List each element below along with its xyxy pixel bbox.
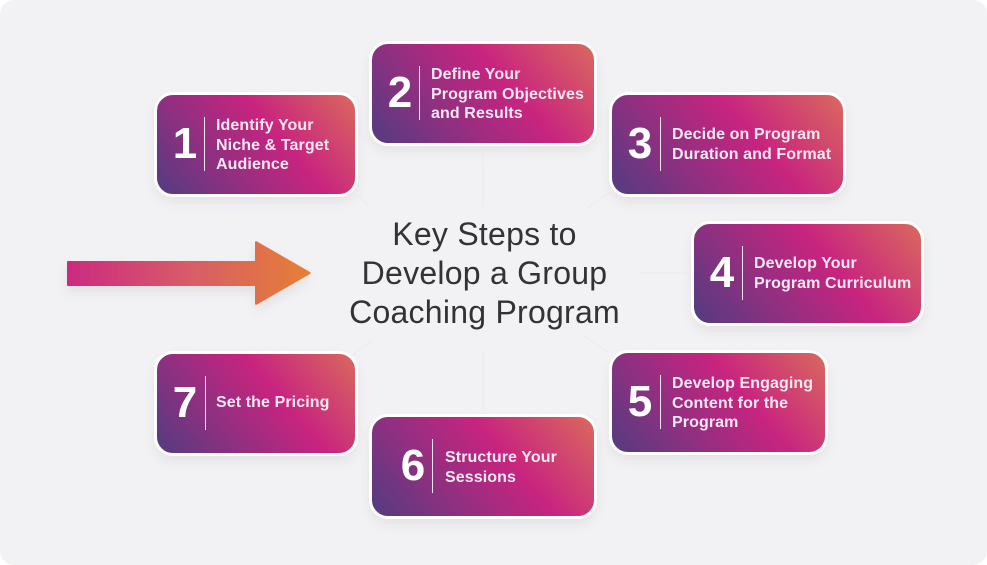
step number 6: 6 [401, 441, 425, 490]
step number 5: 5 [628, 377, 652, 426]
card: step 1 [154, 92, 358, 197]
step text 5 [672, 375, 813, 431]
step text 2: and Results [431, 105, 523, 122]
step number 7: 7 [173, 378, 197, 427]
card: step 6 [369, 414, 597, 519]
step text 2: Program Objectives [431, 86, 584, 102]
step text 1: Niche & Target [216, 136, 329, 154]
title: Develop a Group [362, 255, 607, 291]
step text 5: Develop Engaging [672, 375, 813, 392]
card: step 4 [691, 221, 924, 326]
card: step 3 [609, 92, 846, 197]
step text 6: Structure Your [445, 449, 557, 466]
step text 4 [754, 255, 911, 292]
step text 3: Decide on Program [672, 126, 820, 143]
card: step 7 [154, 351, 358, 456]
card: step 2 [369, 41, 597, 146]
step text 1: Identify Your [216, 117, 314, 134]
step number 4: 4 [710, 248, 734, 297]
card: step 5 [609, 350, 828, 455]
step number 3: 3 [628, 119, 652, 168]
step text 2: Define Your [431, 66, 520, 83]
step text 1: Audience [216, 156, 289, 173]
step text 4: Program Curriculum [754, 274, 911, 292]
step text 7: Set the Pricing [216, 394, 330, 411]
step number 2: 2 [388, 68, 412, 117]
step text 6: Sessions [445, 468, 516, 486]
step text 6 [445, 449, 557, 486]
step text 1 [216, 117, 329, 173]
step text 2 [431, 66, 584, 122]
step number 1: 1 [173, 119, 197, 168]
step text 4: Develop Your [754, 255, 857, 272]
title: Coaching Program [349, 294, 620, 330]
step text 5: Content for the [672, 394, 788, 412]
step text 5: Program [672, 414, 738, 431]
step text 3 [672, 126, 831, 162]
arrow [66, 241, 311, 307]
step text 3: Duration and Format [672, 146, 831, 162]
title [349, 216, 620, 330]
title: Key Steps to [392, 216, 577, 252]
